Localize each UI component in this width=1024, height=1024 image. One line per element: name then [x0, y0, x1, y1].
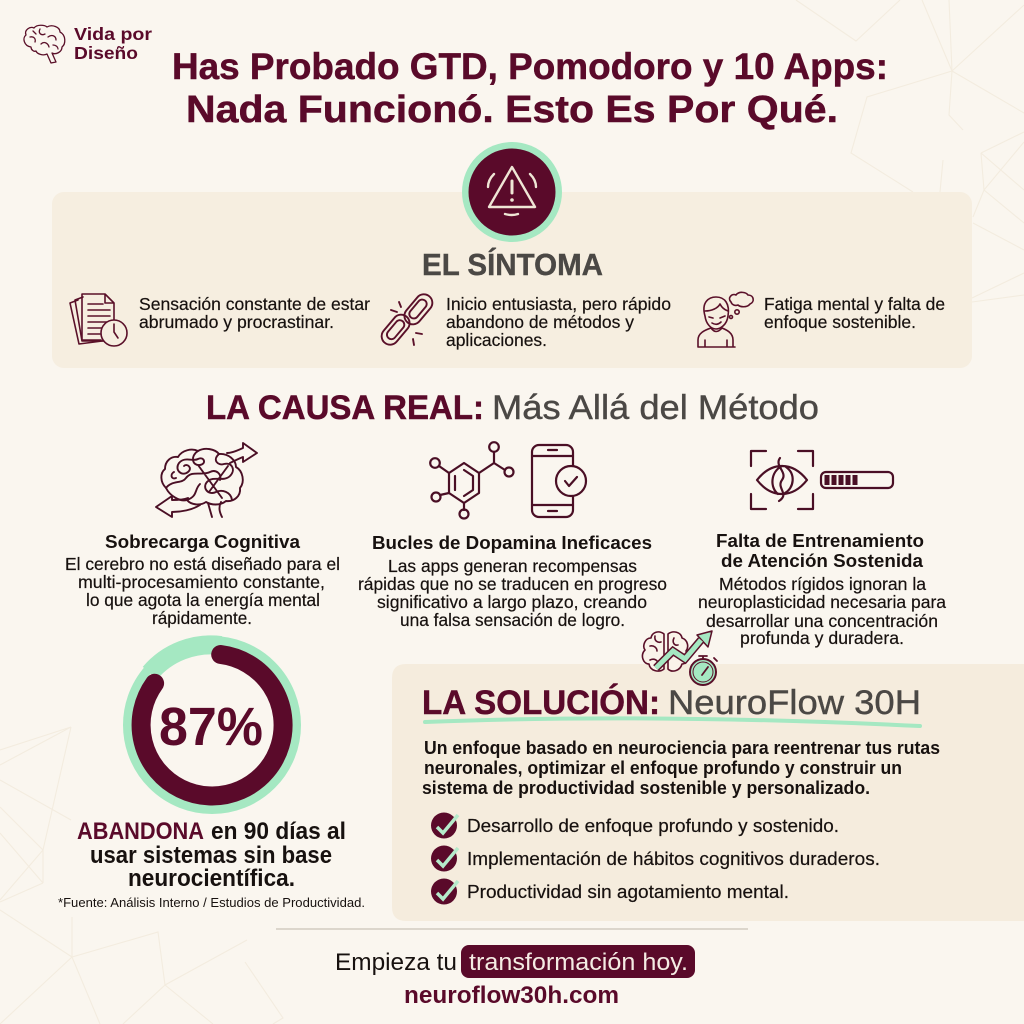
text: abandono de métodos y: [446, 312, 634, 332]
text: enfoque sostenible.: [764, 312, 916, 332]
panel: la solución: [392, 631, 1024, 921]
logo name: Vida por: [74, 24, 152, 44]
text: Inicio entusiasta, pero rápido: [446, 294, 671, 314]
text: [446, 294, 671, 350]
call to action: [335, 945, 695, 1009]
icon: focus eye and progress bar: [751, 451, 893, 509]
heading: la causa real: LA CAUSA REAL:: [206, 389, 484, 427]
icon: logo brain: [24, 25, 65, 63]
description: rápidamente.: [152, 608, 252, 628]
description: El cerebro no está diseñado para el: [65, 554, 340, 574]
stat caption: ABANDONA: [77, 818, 204, 845]
text: [764, 294, 945, 332]
call to action: Empieza tu: [335, 949, 457, 976]
text: [139, 294, 370, 332]
heading: la causa real: [206, 389, 819, 427]
description: multi-procesamiento constante,: [78, 572, 325, 592]
stat: 87% abandona: [58, 640, 365, 910]
symptom: abandono: [378, 291, 671, 350]
solution description: [422, 737, 940, 798]
description: una falsa sensación de logro.: [400, 610, 625, 630]
heading: la solución: NeuroFlow 30H: [668, 684, 921, 722]
stat caption: neurocientífica.: [128, 865, 295, 892]
mint underline: [425, 718, 920, 726]
logo name: [74, 24, 152, 63]
heading: la solución: LA SOLUCIÓN:: [422, 684, 660, 722]
title: Nada Funcionó. Esto Es Por Qué.: [186, 89, 838, 131]
logo: Vida por Diseño: [24, 24, 152, 63]
benefit 2: Implementación de hábitos cognitivos duraderos.: [467, 848, 880, 869]
title: [172, 46, 888, 131]
symptom: fatiga: [698, 292, 945, 347]
description: profunda y duradera.: [740, 628, 904, 648]
heading: Bucles de Dopamina Ineficaces: [372, 532, 652, 553]
description: Métodos rígidos ignoran la: [719, 574, 926, 594]
description: [65, 554, 340, 628]
symptom: abrumado: [70, 294, 370, 346]
icon: alert badge: [462, 142, 562, 242]
solution description: Un enfoque basado en neurociencia para reentrenar tus rutas: [424, 737, 940, 758]
heading: la solución: [422, 684, 921, 722]
text: Fatiga mental y falta de: [764, 294, 945, 314]
stat caption: [77, 818, 346, 892]
heading: el síntoma: EL SÍNTOMA: [422, 247, 603, 282]
number: 87%: [159, 697, 263, 757]
description: Las apps generan recompensas: [388, 556, 637, 576]
chart: 87% donut: [128, 640, 296, 810]
panel: el síntoma: [52, 142, 972, 368]
heading: la causa real: Más Allá del Método: [492, 389, 819, 427]
text: Sensación constante de estar: [139, 294, 370, 314]
heading: Sobrecarga Cognitiva: [105, 531, 301, 552]
description: desarrollar una concentración: [706, 611, 938, 631]
text: abrumado y procrastinar.: [139, 312, 334, 332]
heading: de Atención Sostenida: [721, 550, 924, 571]
icon: documents and clock: [70, 294, 127, 346]
icon: phone with check: [532, 445, 586, 517]
logo name: Diseño: [74, 43, 138, 63]
icon: tangled brain with arrows: [156, 443, 257, 517]
solution description: neuronales, optimizar el enfoque profundo y construir un: [424, 757, 902, 778]
stat caption: en 90 días al: [211, 818, 346, 845]
description: [358, 556, 667, 630]
description: neuroplasticidad necesaria para: [698, 592, 946, 612]
icon: dopamine molecule: [430, 442, 514, 518]
benefit 3: Productividad sin agotamiento mental.: [467, 881, 789, 902]
highlighted pill: transformación hoy.: [469, 949, 688, 976]
description: rápidas que no se traducen en progreso: [358, 574, 667, 594]
title: Has Probado GTD, Pomodoro y 10 Apps:: [172, 46, 888, 87]
heading: [716, 530, 924, 571]
icon: tired person with thought cloud: [698, 292, 753, 347]
cause: bucles de dopamina: [358, 442, 667, 630]
icon: broken chain: [378, 291, 436, 348]
heading: Falta de Entrenamiento: [716, 530, 924, 551]
benefit 1: Desarrollo de enfoque profundo y sostenido.: [467, 815, 839, 836]
solution description: sistema de productividad sostenible y personalizado.: [422, 777, 870, 798]
cause: falta de entrenamiento: [698, 451, 946, 648]
description: significativo a largo plazo, creando: [377, 592, 647, 612]
stat caption: usar sistemas sin base: [90, 842, 332, 869]
website: neuroflow30h.com: [404, 982, 619, 1009]
description: [698, 574, 946, 648]
icon: brain, growth arrow and stopwatch: [642, 631, 717, 685]
cause: sobrecarga cognitiva: [65, 443, 340, 628]
source note: *Fuente: Análisis Interno / Estudios de Productividad.: [58, 895, 365, 910]
text: aplicaciones.: [446, 330, 547, 350]
description: lo que agota la energía mental: [86, 590, 320, 610]
